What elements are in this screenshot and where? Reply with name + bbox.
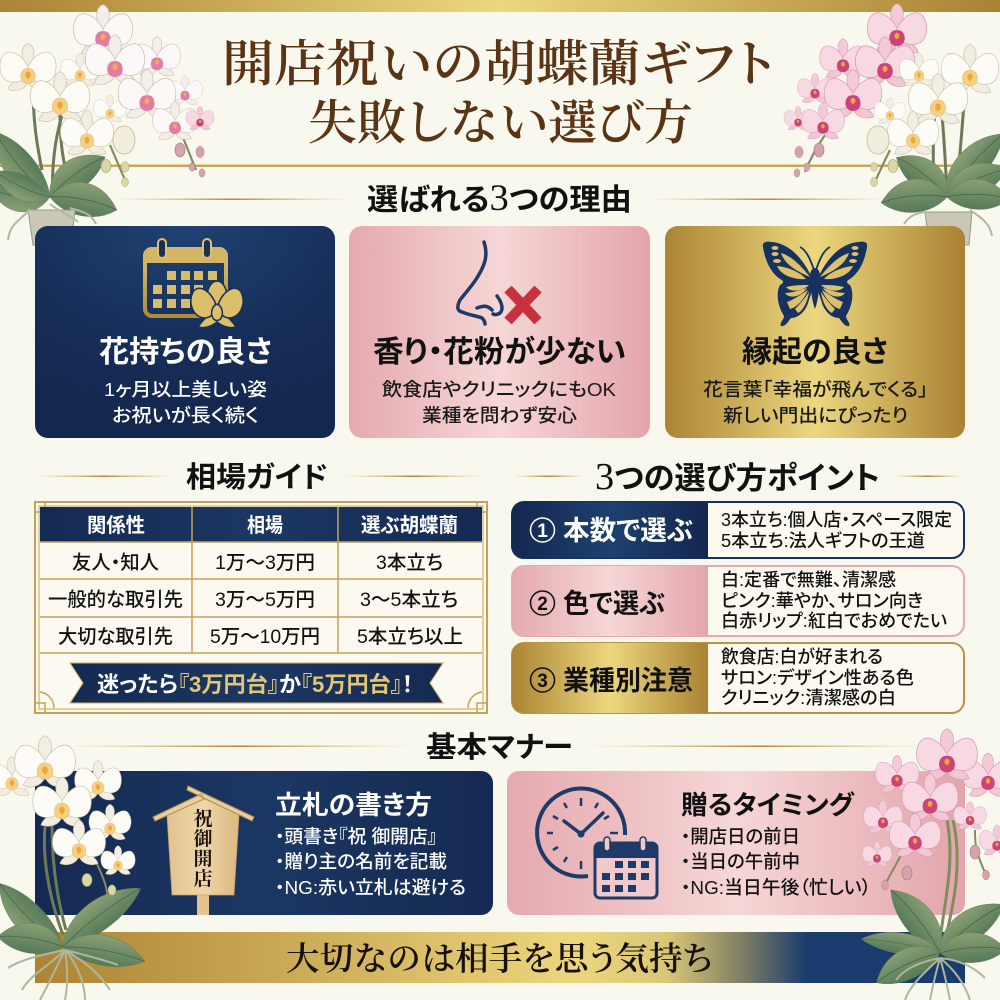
table header	[87, 514, 458, 537]
table rows: 5本立ち以上	[357, 626, 463, 648]
panel: good omen: 縁起の良さ	[742, 336, 888, 369]
orchid: bottom right pink	[860, 729, 1000, 1000]
panel: low scent: 香り・花粉が少ない	[373, 335, 626, 369]
title: 開店祝いの胡蝶蘭ギフト	[222, 36, 775, 92]
panel: point 3: 飲食店:白が好まれる	[721, 646, 883, 667]
panel: low scent	[349, 226, 650, 438]
panel: long lasting: 1ヶ月以上美しい姿	[104, 379, 267, 400]
panel: point 1: 3本立ち:個人店・スペース限定	[721, 510, 952, 530]
panel: timing: 贈るタイミング	[681, 790, 855, 820]
icon: wooden sign: 店	[193, 868, 213, 890]
top gold band	[0, 0, 1000, 12]
panel: timing	[507, 771, 965, 915]
table rows: 3～5本立ち	[360, 589, 458, 611]
icon: nose with cross	[458, 242, 538, 324]
panel: timing: ・当日の午前中	[681, 851, 800, 872]
panel: sign etiquette: ・NG:赤い立札は避ける	[275, 877, 466, 898]
table rows: 友人・知人	[72, 552, 159, 574]
icon: butterfly	[763, 242, 867, 326]
heading: selection points: 3つの選び方ポイント	[595, 456, 880, 498]
panel: low scent: 飲食店やクリニックにもOK	[382, 379, 617, 400]
panel: sign etiquette	[35, 771, 493, 915]
orchid: bottom left white	[0, 736, 148, 1000]
table rows: 3万～5万円	[215, 589, 315, 611]
panel: good omen: 花言葉「幸福が飛んでくる」	[703, 379, 928, 400]
panel: timing: ・NG:当日午後（忙しい）	[681, 877, 871, 898]
table rows: 3本立ち	[376, 552, 443, 574]
ribbon callout	[70, 663, 443, 703]
title divider	[0, 164, 1000, 167]
panel: point 3: クリニック:清潔感の白	[721, 688, 896, 708]
table rows	[48, 552, 463, 648]
panel: sign etiquette: ・頭書き『祝 御開店』	[275, 826, 437, 847]
panel: price table	[35, 502, 487, 713]
orchid: top left white	[0, 5, 214, 245]
panel: point 2: ピンク:華やか、サロン向き	[721, 591, 923, 611]
heading: reasons: 選ばれる3つの理由	[367, 178, 632, 219]
orchid: top right pink and white	[784, 4, 1000, 245]
panel: point 3: 業種別注意	[563, 666, 693, 696]
icon: clock and calendar	[537, 789, 657, 898]
panel: sign etiquette: 立札の書き方	[275, 790, 432, 820]
table header: 関係性	[87, 514, 145, 537]
icon: wooden sign: 御	[193, 828, 213, 850]
panel: long lasting	[35, 226, 335, 438]
closing banner	[35, 932, 965, 983]
table rows: 5万～10万円	[210, 626, 320, 648]
table header: 相場	[247, 514, 283, 537]
ribbon callout: 迷ったら『3万円台』か『5万円台』！	[97, 672, 413, 697]
panel: point 1: 1	[537, 521, 548, 542]
icon: wooden sign	[153, 786, 254, 915]
panel: point 2: 色で選ぶ	[563, 589, 665, 619]
panel: point 1: 本数で選ぶ	[563, 516, 693, 546]
closing banner: 大切なのは相手を思う気持ち	[286, 941, 713, 978]
panel: point 3: 3	[537, 671, 548, 692]
table rows: 大切な取引先	[58, 626, 173, 648]
table header: 選ぶ胡蝶蘭	[361, 514, 458, 537]
heading: basic manners: 基本マナー	[426, 731, 573, 764]
panel: low scent: 業種を問わず安心	[422, 405, 578, 426]
table rows: 一般的な取引先	[48, 589, 183, 611]
panel: point 3	[512, 643, 964, 713]
title: 失敗しない選び方	[308, 97, 693, 150]
panel: long lasting: お祝いが長く続く	[112, 405, 259, 426]
panel: point 2: 白赤リップ:紅白でおめでたい	[721, 611, 947, 631]
table rows: 1万～3万円	[215, 552, 315, 574]
heading: price guide: 相場ガイド	[186, 461, 328, 494]
icon: calendar with orchid	[143, 239, 243, 328]
panel: good omen	[665, 226, 965, 438]
panel: long lasting: 花持ちの良さ	[99, 336, 272, 369]
panel: good omen: 新しい門出にぴったり	[723, 405, 908, 426]
title	[222, 36, 775, 150]
panel: sign etiquette: ・贈り主の名前を記載	[275, 851, 447, 872]
panel: point 3: サロン:デザイン性ある色	[721, 667, 914, 688]
panel: point 2: 白:定番で無難、清潔感	[721, 570, 896, 590]
panel: timing: ・開店日の前日	[681, 826, 800, 847]
icon: wooden sign: 祝	[193, 807, 213, 830]
panel: point 1: 5本立ち:法人ギフトの王道	[721, 531, 925, 551]
icon: wooden sign: 開	[193, 848, 213, 870]
panel: point 2: 2	[537, 594, 548, 615]
panel: point 1	[512, 502, 964, 558]
panel: point 2	[512, 566, 964, 636]
